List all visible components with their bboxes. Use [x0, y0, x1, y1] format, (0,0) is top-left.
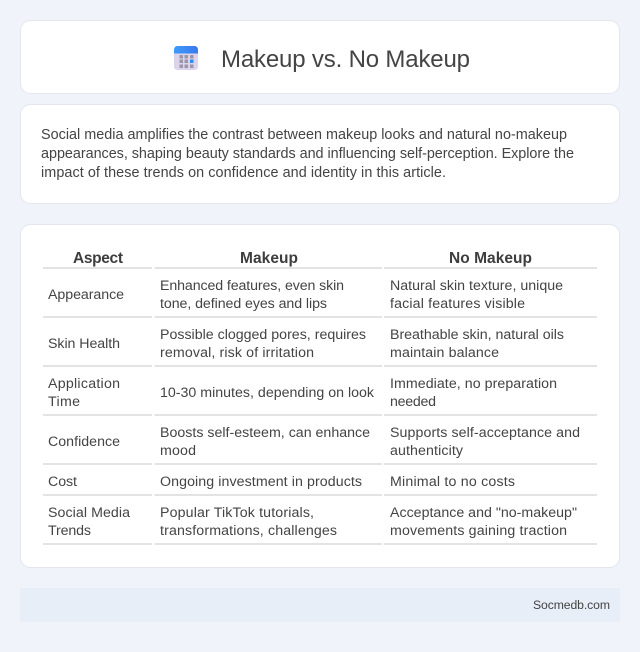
column headers: Makeup: [240, 250, 298, 267]
row: appearance: [48, 278, 563, 312]
column headers: Aspect: [73, 250, 123, 267]
row: confidence: authenticity: [390, 443, 464, 459]
row: social media trends: Acceptance and "no-makeup": [390, 505, 577, 521]
row: social media trends: movements gaining traction: [390, 523, 567, 539]
comparison table panel: [20, 224, 620, 568]
row: application time: 10-30 minutes, depending on look: [160, 385, 375, 401]
row: confidence: Confidence: [48, 434, 120, 450]
row: appearance: tone, defined eyes and lips: [160, 296, 327, 312]
row: social media trends: [48, 505, 577, 539]
row: application time: Immediate, no preparation: [390, 376, 557, 392]
table: [43, 250, 597, 545]
row: confidence: Boosts self-esteem, can enhance: [160, 425, 370, 441]
icon: calendar: [174, 46, 198, 70]
row: appearance: Enhanced features, even skin: [160, 278, 344, 294]
row: skin health: [48, 327, 564, 361]
row: social media trends: Social Media: [48, 505, 130, 521]
row: appearance: Appearance: [48, 287, 124, 303]
row: application time: [48, 376, 557, 410]
row: appearance: facial features visible: [390, 296, 525, 312]
intro text: appearances, shaping beauty standards and influencing self-perception. Explore the: [41, 146, 574, 162]
row: confidence: Supports self-acceptance and: [390, 425, 580, 441]
row: application time: Time: [48, 394, 80, 410]
intro text: [41, 127, 574, 181]
row: cost: Cost: [48, 474, 77, 490]
title card: [20, 20, 620, 94]
row: social media trends: transformations, challenges: [160, 523, 337, 539]
row: skin health: Skin Health: [48, 336, 120, 352]
row: cost: Ongoing investment in products: [160, 474, 362, 490]
footer text: Socmedb.com: [533, 598, 610, 612]
heading: Makeup vs. No Makeup: [221, 46, 470, 73]
column headers: [73, 250, 532, 267]
row: skin health: Breathable skin, natural oils: [390, 327, 564, 343]
row: appearance: Natural skin texture, unique: [390, 278, 563, 294]
intro text: impact of these trends on confidence and identity in this article.: [41, 165, 446, 181]
row: cost: [48, 474, 515, 490]
row: cost: Minimal to no costs: [390, 474, 515, 490]
row: confidence: mood: [160, 443, 196, 459]
row: application time: Application: [48, 376, 120, 392]
row: skin health: removal, risk of irritation: [160, 345, 314, 361]
row: application time: needed: [390, 394, 436, 410]
footer bar: [20, 588, 620, 622]
row: skin health: maintain balance: [390, 345, 499, 361]
row: skin health: Possible clogged pores, requires: [160, 327, 366, 343]
row: social media trends: Trends: [48, 523, 91, 539]
intro text: Social media amplifies the contrast between makeup looks and natural no-makeup: [41, 127, 567, 143]
row: social media trends: Popular TikTok tutorials,: [160, 505, 314, 521]
intro text panel: [20, 104, 620, 204]
column headers: No Makeup: [449, 250, 532, 267]
row: confidence: [48, 425, 580, 459]
